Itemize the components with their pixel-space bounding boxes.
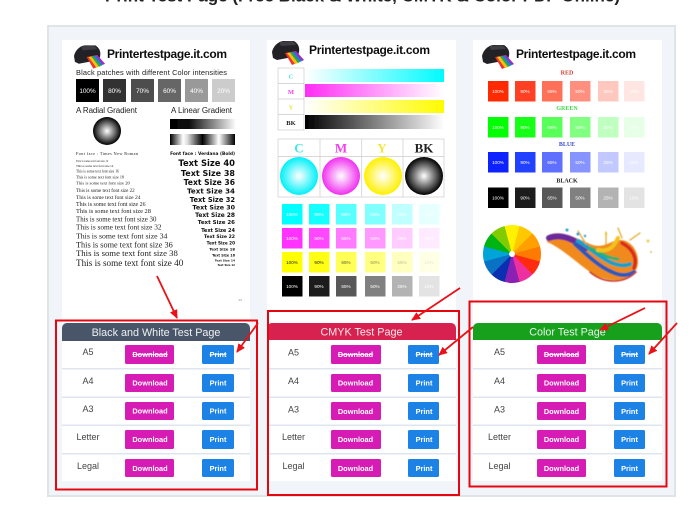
green patches: 10% xyxy=(629,125,639,130)
black patches: 10% xyxy=(629,196,639,200)
arrow: to black and white print xyxy=(237,323,258,352)
CMYK radial gradient table: C xyxy=(294,140,304,156)
Times New Roman text samples: Font face : Times New Roman xyxy=(76,151,139,156)
Times New Roman text samples: This is some text font size 18 xyxy=(76,174,124,180)
row: Legal: Legal xyxy=(488,461,511,471)
row: A5 xyxy=(288,345,439,364)
black patches: 100% xyxy=(286,284,298,289)
row: A3: A3 xyxy=(82,404,94,414)
row: Legal: Download xyxy=(338,464,374,473)
header: CMYK Test Page: CMYK Test Page xyxy=(320,326,403,338)
Times New Roman text samples xyxy=(76,151,184,268)
row: A4: Download xyxy=(544,378,580,388)
row: A4: Print xyxy=(416,378,433,388)
black patches xyxy=(282,276,440,296)
black patches: 50% xyxy=(370,284,380,289)
row: Letter xyxy=(76,430,234,449)
black intensity patches: 80% xyxy=(108,88,121,95)
Verdana bold text samples: Text Size 28 xyxy=(195,213,235,219)
panel: color download table xyxy=(473,323,662,481)
row: A5: Download xyxy=(132,350,168,359)
yellow patches: 25% xyxy=(397,260,407,265)
icon: printer xyxy=(272,41,304,65)
row: Legal: Legal xyxy=(282,461,305,471)
Verdana bold text samples: Text Size 26 xyxy=(198,220,235,226)
Verdana bold text samples: Text Size 40 xyxy=(178,158,235,168)
row: Letter: Letter xyxy=(282,432,305,442)
black intensity patches xyxy=(76,79,235,102)
CMYK gradient strips: BK xyxy=(286,120,296,127)
green patches: 90% xyxy=(520,125,530,130)
row: A5: Download xyxy=(338,350,374,359)
arrow: to color print xyxy=(649,323,677,354)
Times New Roman text samples: This is some text font size 28 xyxy=(76,208,151,215)
black intensity patches: 60% xyxy=(163,88,176,95)
cyan patches: 90% xyxy=(314,212,324,217)
magenta patches: 90% xyxy=(314,236,324,241)
yellow patches: 10% xyxy=(424,260,434,265)
Times New Roman text samples: This is some text font size 34 xyxy=(76,232,167,240)
row: Legal xyxy=(77,459,234,477)
icon: printer xyxy=(74,45,105,69)
row: Letter: Print xyxy=(210,435,227,444)
green patches: 50% xyxy=(575,125,585,130)
Times New Roman text samples: This is some text font size 36 xyxy=(76,240,173,250)
row: Letter: Download xyxy=(338,435,374,444)
callout box: CMYK table xyxy=(268,311,459,495)
logo text: Printertestpage.it.com xyxy=(309,43,430,57)
Verdana bold text samples: Text Size 38 xyxy=(181,169,235,178)
row: Letter xyxy=(282,430,439,449)
header: CMYK Test Page xyxy=(267,323,456,340)
black patches: 90% xyxy=(520,196,530,200)
row: A4: A4 xyxy=(494,376,505,386)
magenta patches: 25% xyxy=(397,236,407,241)
cyan patches: 65% xyxy=(341,212,351,217)
row: A3 xyxy=(288,402,439,420)
red patches: 100% xyxy=(492,89,504,94)
row: A3: Print xyxy=(210,406,227,416)
Verdana bold text samples xyxy=(170,151,236,267)
radial gradient circle xyxy=(93,117,121,145)
black patches: 90% xyxy=(314,284,324,289)
Verdana bold text samples: Text Size 12 xyxy=(217,263,235,267)
yellow patches: 90% xyxy=(314,260,324,265)
arrow: to black and white header xyxy=(157,276,177,318)
row: A3 xyxy=(494,402,645,420)
row: Legal: Print xyxy=(621,464,638,473)
Verdana bold text samples: Text Size 20 xyxy=(207,240,235,246)
CMYK radial gradient table: M xyxy=(335,140,347,156)
magenta patches: 100% xyxy=(286,236,298,241)
linear gradient bars xyxy=(170,119,236,145)
yellow patches: 100% xyxy=(286,260,298,265)
row: A4 xyxy=(494,374,645,392)
blue patches: 50% xyxy=(575,160,585,165)
header: Color Test Page: Color Test Page xyxy=(529,326,606,338)
row: A4 xyxy=(288,374,439,392)
row: Letter: Letter xyxy=(488,432,511,442)
Times New Roman text samples: This is some text font size 30 xyxy=(76,216,157,224)
callout box: black and white table xyxy=(56,320,257,490)
CMYK radial gradient table xyxy=(278,139,444,197)
row: A4 xyxy=(82,374,234,392)
row: Legal: Print xyxy=(210,464,227,473)
magenta patches: 50% xyxy=(370,236,380,241)
blue patches: 25% xyxy=(603,160,613,165)
cyan patches: 10% xyxy=(424,212,434,217)
panel: CMYK download table xyxy=(267,323,456,481)
panel: black and white download table xyxy=(62,323,250,481)
row: Letter: Print xyxy=(416,435,433,444)
row: A4: A4 xyxy=(288,376,299,386)
Times New Roman text samples: This is some text font size 40 xyxy=(76,258,184,268)
Times New Roman text samples: This is some text font size 26 xyxy=(76,201,146,208)
panel: color test sheet xyxy=(473,40,662,323)
black patches xyxy=(488,188,644,208)
black patches: 65% xyxy=(547,196,557,200)
logo text: Printertestpage.it.com xyxy=(107,47,227,61)
row: Legal: Download xyxy=(544,464,580,473)
red patches: 10% xyxy=(629,89,639,94)
Verdana bold text samples: Text Size 30 xyxy=(192,204,236,212)
cyan patches: 25% xyxy=(397,212,407,217)
blue patches xyxy=(488,152,644,172)
CMYK gradient strips xyxy=(278,68,444,130)
black patches: 10% xyxy=(424,284,434,289)
arrow: to color header xyxy=(600,308,645,330)
paint splash illustration xyxy=(547,228,652,281)
row: Legal xyxy=(282,459,439,477)
row: A3: Download xyxy=(338,407,374,416)
row: Letter: Download xyxy=(132,435,168,444)
black intensity patches: 70% xyxy=(136,88,149,95)
Times New Roman text samples: This is some text font size 14 xyxy=(76,164,114,168)
green patches: 25% xyxy=(603,125,613,130)
panel: CMYK test sheet xyxy=(267,40,456,323)
yellow patches xyxy=(282,252,440,272)
header: Black and White Test Page xyxy=(62,323,250,341)
blue patches: 65% xyxy=(547,160,557,165)
black intensity patches: 100% xyxy=(79,88,96,95)
row: A5: A5 xyxy=(288,348,299,358)
row: Letter: Print xyxy=(621,435,638,444)
header: Color Test Page xyxy=(473,323,662,340)
Times New Roman text samples: This is some text font size 32 xyxy=(76,222,162,232)
Verdana bold text samples: Text Size 22 xyxy=(204,234,235,240)
panel: black and white test sheet xyxy=(62,40,250,323)
cyan patches xyxy=(282,204,440,224)
arrow: to CMYK header xyxy=(412,288,460,320)
magenta patches xyxy=(282,228,440,248)
row: A5: Print xyxy=(210,350,227,359)
row: A5 xyxy=(494,345,645,364)
cyan patches: 100% xyxy=(286,212,298,217)
arrow: to CMYK print xyxy=(439,327,473,355)
callout box: color table xyxy=(470,302,666,486)
row: A3: Print xyxy=(621,407,638,416)
magenta patches: 10% xyxy=(424,236,434,241)
Verdana bold text samples: Font face : Verdana (Bold) xyxy=(170,151,235,157)
Times New Roman text samples: This is some text font size 38 xyxy=(76,248,178,258)
row: Letter: Letter xyxy=(76,432,100,442)
row: A3: Download xyxy=(544,407,580,416)
black intensity patches: 20% xyxy=(217,88,230,95)
row: A3: A3 xyxy=(288,404,299,414)
black patches: 65% xyxy=(341,284,351,289)
logo text: Printertestpage.it.com xyxy=(516,47,636,61)
Times New Roman text samples: This is some text font size 22 xyxy=(76,189,135,194)
Verdana bold text samples: Text Size 16 xyxy=(212,254,236,258)
Verdana bold text samples: Text Size 36 xyxy=(184,178,235,187)
row: A3: Print xyxy=(416,407,433,416)
CMYK radial gradient table: BK xyxy=(415,140,434,156)
row: Letter: Download xyxy=(544,435,580,444)
blue patches: 10% xyxy=(629,160,639,165)
Times New Roman text samples: This is some text font size 20 xyxy=(76,180,131,186)
yellow patches: 50% xyxy=(370,260,380,265)
row: A3: A3 xyxy=(494,404,505,414)
red label: RED xyxy=(561,70,574,76)
heading: linear gradient: A Linear Gradient xyxy=(171,106,233,115)
row: Legal: Legal xyxy=(77,461,99,471)
green patches xyxy=(488,117,644,138)
row: A4: Download xyxy=(338,378,374,388)
cyan patches: 50% xyxy=(370,212,380,217)
black intensity patches: 40% xyxy=(190,88,203,95)
row: A5: Print xyxy=(621,350,638,359)
black patches: 50% xyxy=(575,196,585,200)
blue label: BLUE xyxy=(559,142,575,148)
row: A3: Download xyxy=(132,406,168,416)
Times New Roman text samples: This is some text font size 24 xyxy=(76,194,141,201)
row: A5 xyxy=(82,345,234,364)
red patches: 25% xyxy=(603,89,613,94)
black patches: 25% xyxy=(603,196,613,200)
green patches: 65% xyxy=(547,125,557,130)
black patches: 100% xyxy=(492,196,504,200)
row: Letter xyxy=(488,430,645,449)
blue patches: 90% xyxy=(520,160,530,165)
row: A5: Download xyxy=(544,350,580,359)
icon: printer xyxy=(482,45,514,69)
magenta patches: 65% xyxy=(341,236,351,241)
row: A4: A4 xyxy=(82,376,94,386)
Verdana bold text samples: Text Size 34 xyxy=(187,186,235,196)
row: A5: A5 xyxy=(494,347,505,357)
row: Legal: Print xyxy=(416,464,433,473)
page number: 14 xyxy=(238,298,242,302)
red patches: 50% xyxy=(575,89,585,94)
Verdana bold text samples: Text Size 18 xyxy=(209,246,235,252)
green label: GREEN xyxy=(556,106,578,112)
yellow patches: 65% xyxy=(341,260,351,265)
black label: BLACK xyxy=(556,178,578,184)
row: A3 xyxy=(82,402,234,420)
header: Black and White Test Page: Black and White Test Page xyxy=(92,327,220,339)
color wheel xyxy=(483,225,541,283)
Times New Roman text samples: This is some text font size 12 xyxy=(76,160,109,163)
CMYK radial gradient table: Y xyxy=(377,140,387,156)
row: Legal: Download xyxy=(132,464,168,473)
row: A4: Print xyxy=(210,378,227,388)
row: A4: Print xyxy=(621,378,638,388)
black patches: 25% xyxy=(397,284,407,289)
Verdana bold text samples: Text Size 14 xyxy=(215,258,235,262)
CMYK gradient strips: Y xyxy=(289,104,294,112)
row: Legal xyxy=(488,459,645,477)
row: A5: Print xyxy=(416,350,433,359)
Times New Roman text samples: This is some text font size 16 xyxy=(76,170,119,174)
green patches: 100% xyxy=(492,125,504,130)
red patches: 65% xyxy=(547,89,557,94)
heading: black patches: Black patches with different Color intensities xyxy=(76,68,227,77)
CMYK gradient strips: C xyxy=(289,74,294,80)
row: A5: A5 xyxy=(82,347,94,357)
Verdana bold text samples: Text Size 32 xyxy=(190,196,235,204)
red patches xyxy=(488,81,644,102)
heading: radial gradient: A Radial Gradient xyxy=(76,106,138,115)
Verdana bold text samples: Text Size 24 xyxy=(201,228,236,234)
row: A4: Download xyxy=(132,378,168,388)
CMYK gradient strips: M xyxy=(288,89,294,96)
blue patches: 100% xyxy=(492,160,504,165)
red patches: 90% xyxy=(520,89,530,94)
